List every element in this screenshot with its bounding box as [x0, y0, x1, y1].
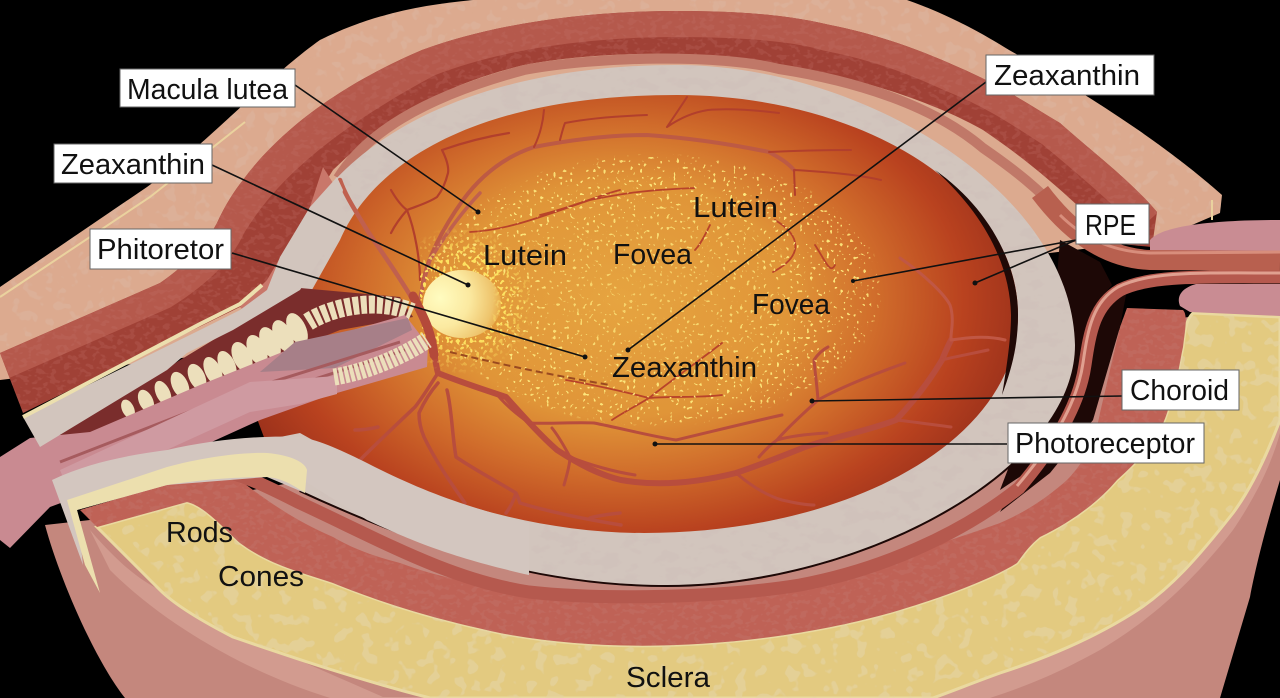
upper red layer [0, 11, 1157, 413]
nerve fibre teeth [118, 305, 412, 421]
label: Zeaxanthin right: Zeaxanthin [994, 60, 1140, 92]
dark line under ring [300, 345, 1075, 585]
label: Phitoretor: Phitoretor [97, 234, 224, 266]
text: Zeaxanthin center: Zeaxanthin [612, 352, 757, 384]
text: Cones: Cones [218, 561, 304, 593]
dark wedge beside choroid [1000, 295, 1126, 512]
cream membrane lower left [67, 453, 307, 593]
leader end dots [466, 210, 978, 446]
pink membrane strips [213, 59, 1280, 597]
dark gap behind right ring [1000, 240, 1112, 490]
label: Zeaxanthin left: Zeaxanthin [61, 149, 205, 181]
grey layer lower left [52, 437, 529, 575]
retina fundus [250, 95, 1018, 533]
label: Macula lutea: Macula lutea [127, 74, 289, 106]
retinal vessels [340, 97, 1005, 525]
label: Choroid: Choroid [1130, 375, 1229, 407]
label: RPE [1076, 204, 1149, 244]
text: Lutein left: Lutein [483, 240, 567, 272]
optic disc [423, 270, 501, 338]
upper peach tissue layer [0, 0, 1222, 380]
nerve dark channel [40, 288, 413, 470]
optic nerve pink sheath [0, 315, 428, 548]
dense pigment dots near disc [420, 228, 530, 372]
text: Sclera: Sclera [626, 662, 711, 694]
label: Zeaxanthin right [986, 55, 1154, 95]
lutein zeaxanthin pigment dots [420, 150, 890, 435]
leader lines [212, 82, 1122, 444]
dark pigment streak [450, 352, 610, 385]
label: Photoreceptor: Photoreceptor [1015, 428, 1195, 460]
label: Choroid [1122, 370, 1239, 410]
text: Lutein upper: Lutein [693, 192, 778, 224]
left pink fin [240, 167, 335, 325]
sclera yellow layer [94, 312, 1280, 698]
right pink tubes [1150, 220, 1280, 316]
grey ring layer [280, 65, 1075, 585]
outer pink sclera wall [45, 300, 1280, 698]
lower choroid red layer [80, 308, 1186, 646]
grey layer left arm [23, 177, 343, 447]
text: Rods: Rods [166, 517, 233, 549]
inner shadow at retina right edge [935, 170, 1018, 395]
vessel trunk at optic nerve [413, 296, 434, 355]
lower nerve fibre row [334, 340, 427, 377]
text: Fovea right: Fovea [752, 289, 831, 321]
text: Fovea center: Fovea [613, 239, 693, 271]
label: RPE: RPE [1085, 210, 1136, 242]
